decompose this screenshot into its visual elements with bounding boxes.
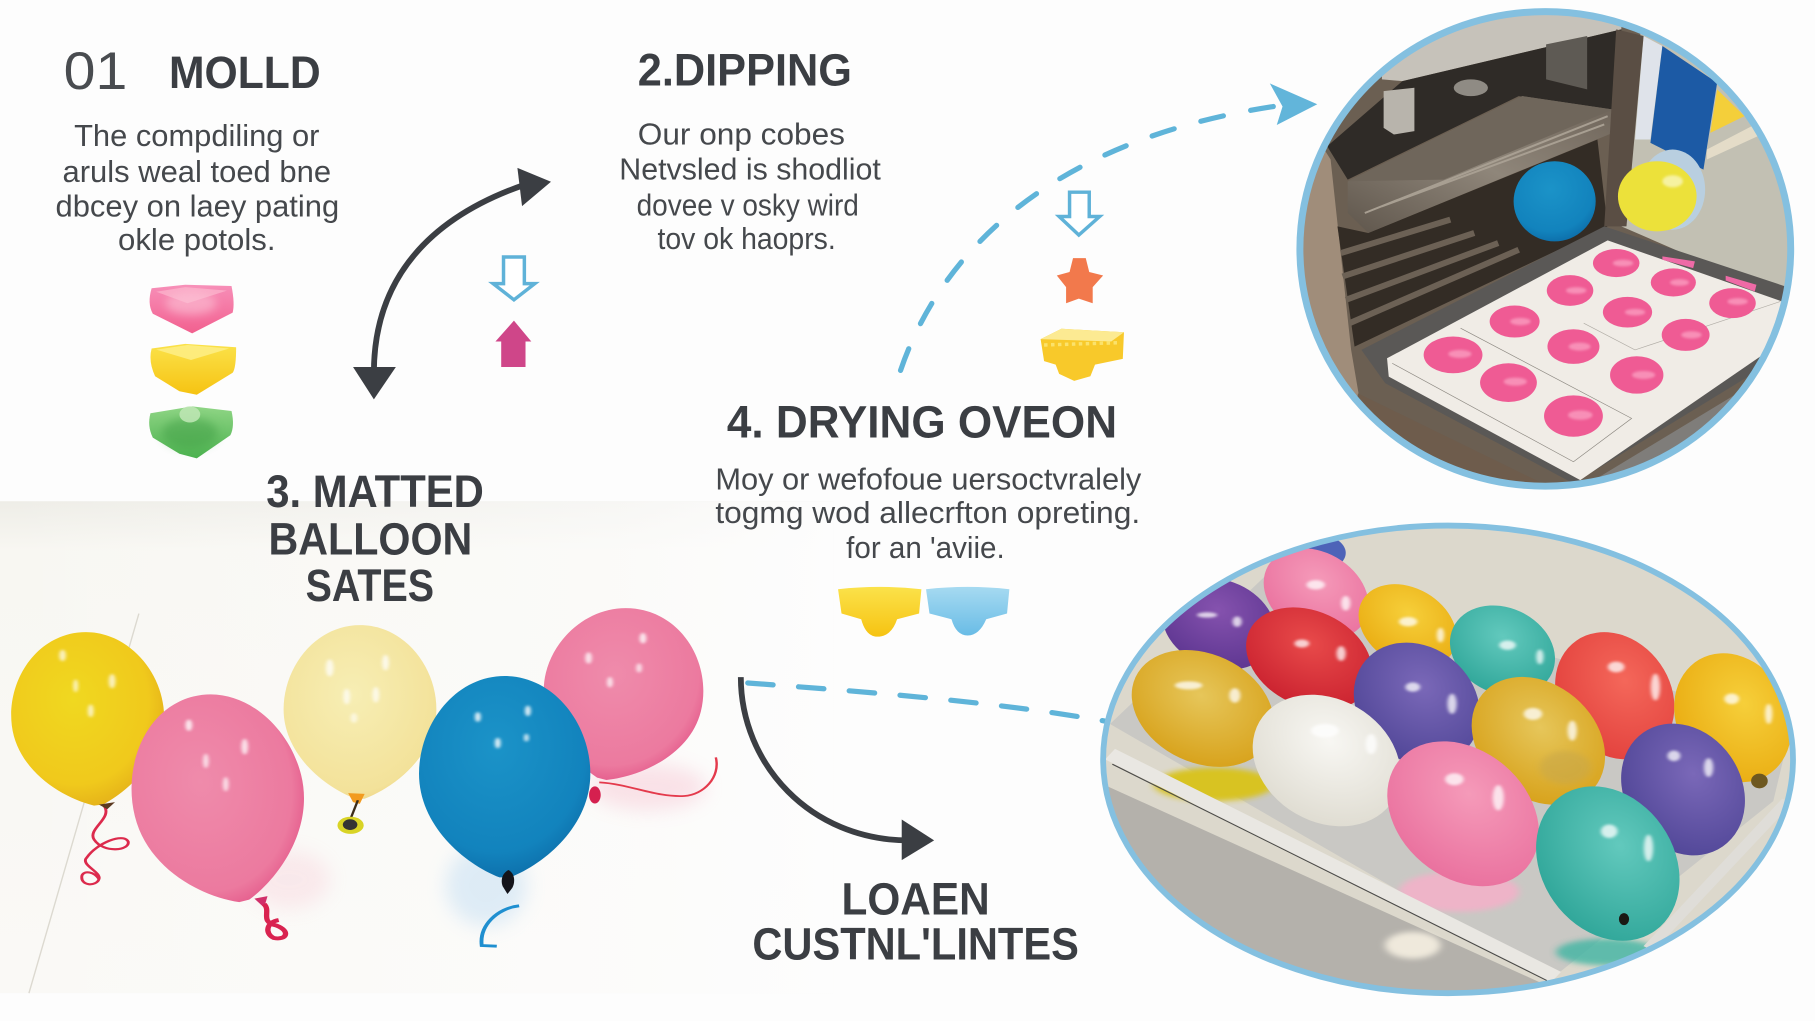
below tray — [1358, 394, 1360, 398]
tray floor — [1110, 576, 1792, 979]
blue ball — [1514, 161, 1596, 241]
step 2 body text — [619, 119, 882, 256]
tray rim — [1110, 754, 1556, 977]
step 1 body text: The compdiling or — [74, 120, 319, 153]
dark interior — [1327, 29, 1621, 180]
step 1 body text: dbcey on laey pating — [56, 190, 339, 223]
balloon: pink front — [110, 676, 327, 938]
lower dark rack — [1337, 140, 1608, 347]
right side floor — [1622, 34, 1788, 286]
photo: five balloons on white surface — [0, 501, 833, 993]
icon: yellow and blue moulds — [838, 587, 1009, 637]
icon: green mould — [149, 406, 233, 458]
balloon highlights — [1175, 580, 1772, 861]
icon: magenta arrow up — [495, 321, 531, 367]
step 1 heading: MOLLD — [169, 47, 321, 98]
blue panel — [1635, 36, 1662, 140]
step 1 heading — [64, 42, 321, 101]
step 2 body text: tov ok haoprs. — [657, 223, 836, 256]
icon: orange star — [1057, 258, 1103, 303]
upper shelf — [1348, 96, 1613, 233]
photo: oven with pink domes on tray — [1296, 8, 1794, 490]
final label: LOAEN — [842, 873, 990, 924]
final label — [752, 873, 1079, 970]
arrow: dark two-headed curve from mould to dipping — [353, 168, 551, 399]
pink tabs — [1662, 256, 1756, 291]
step 4 heading: 4. DRYING OVEON — [727, 397, 1117, 448]
tray white liner — [1387, 240, 1782, 480]
balloon tray photo border — [1103, 526, 1793, 993]
arrow: blue dashed curve to oven photo — [901, 83, 1317, 370]
balloon: yellow — [2, 623, 174, 884]
icon: yellow mould — [150, 344, 236, 395]
step 4 body text: for an 'aviie. — [846, 532, 1005, 565]
yellow ball with pale disc — [1649, 150, 1706, 230]
arrow: blue dashed line to balloon tray — [748, 683, 1105, 721]
icon: yellow tray mould — [1041, 329, 1124, 381]
oven photo border — [1300, 12, 1791, 486]
left column — [1303, 152, 1358, 396]
step 4 body text: Moy or wefofoue uersoctvralely — [715, 464, 1141, 497]
step 1 body text: okle potols. — [118, 224, 275, 257]
balloon: blue — [419, 676, 590, 946]
step 2 body text: Our onp cobes — [638, 119, 845, 152]
balloon: pink rear — [524, 591, 721, 804]
icon: yellow mould — [838, 587, 921, 637]
icon: outline arrow down — [493, 257, 535, 300]
final label: CUSTNL'LINTES — [752, 919, 1079, 970]
step 3 heading — [266, 466, 484, 611]
icon: three mould pieces — [149, 285, 236, 458]
step 4 body text: togmg wod allecrfton opreting. — [715, 497, 1140, 530]
balloons back to front — [1132, 548, 1790, 941]
step 3 heading: 3. MATTED — [266, 466, 484, 517]
step 3 heading: SATES — [306, 560, 434, 611]
steel table — [1108, 787, 1539, 990]
icon: pink mould — [150, 285, 234, 333]
pink domes — [1424, 249, 1756, 437]
piston — [1384, 88, 1414, 135]
icon: outline arrow down, second — [1059, 192, 1100, 235]
step 3 heading: BALLOON — [269, 513, 472, 564]
balloon knots — [1619, 913, 1629, 925]
top steel housing — [1382, 13, 1621, 81]
arrow: dark curve to final label — [741, 677, 934, 860]
balloon: cream — [284, 625, 436, 834]
step 2 heading: 2.DIPPING — [638, 45, 852, 96]
step 1 body text: aruls weal toed bne — [63, 156, 331, 189]
step 2 body text: Netvsled is shodliot — [619, 153, 882, 186]
step 2 body text: dovee v osky wird — [637, 189, 859, 222]
vertical post — [1604, 29, 1644, 226]
step 1 heading: 01 — [64, 42, 127, 101]
step 1 body text — [56, 120, 339, 257]
photo: coloured balloons on a metal tray — [1100, 522, 1796, 996]
blue background balloon — [1308, 540, 1346, 562]
tray rim — [1361, 226, 1786, 483]
step 4 body text — [715, 464, 1141, 565]
icon: blue mould — [926, 587, 1009, 636]
